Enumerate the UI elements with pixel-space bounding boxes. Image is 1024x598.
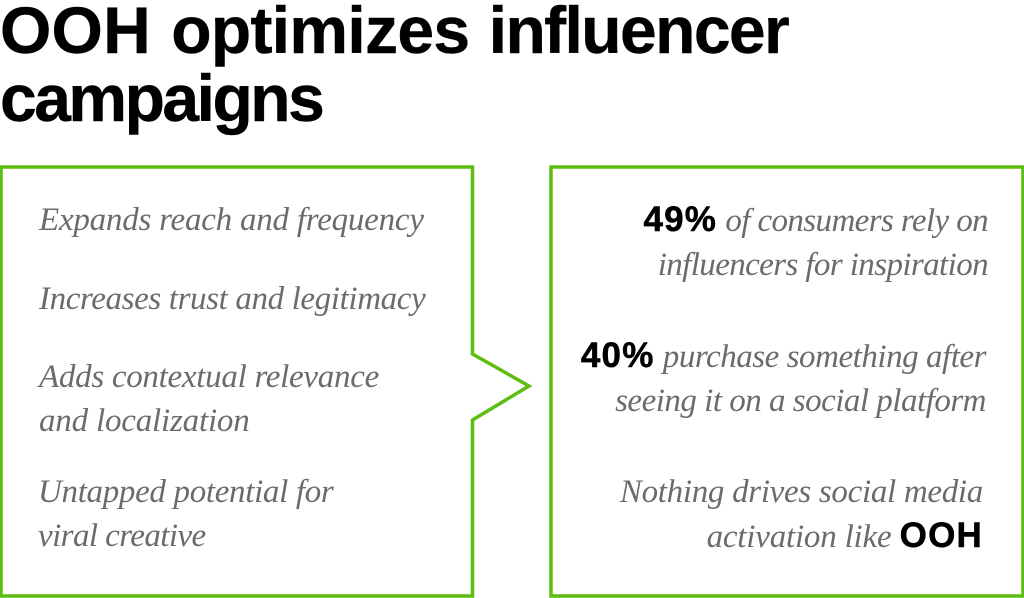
text: viral creative: viral creative <box>38 518 206 554</box>
stat: 40 percent: seeing it on a social platform <box>615 383 986 419</box>
title: campaigns <box>0 61 322 135</box>
stat: 49 percent: influencers for inspiration <box>658 247 988 283</box>
stat: 49 percent <box>643 200 988 283</box>
panel: right box <box>549 165 1024 598</box>
text: viral creative <box>38 474 334 554</box>
text: OOH activation: Nothing drives social media <box>620 474 983 510</box>
text: OOH activation <box>620 474 983 555</box>
stat: 40 percent: 40% purchase something after <box>581 336 986 375</box>
text: expands reach: Expands reach and frequency <box>39 202 424 238</box>
text: increases trust: Increases trust and legitimacy <box>39 281 425 317</box>
text: contextual relevance: and localization <box>39 403 250 439</box>
panel: left callout box with arrow <box>0 165 532 598</box>
text: contextual relevance: Adds contextual relevance <box>39 359 379 395</box>
text: contextual relevance <box>37 359 379 439</box>
stat: 40 percent <box>581 336 986 419</box>
text: viral creative: Untapped potential for <box>38 474 333 510</box>
title <box>0 0 789 136</box>
stat: 49 percent: 49% of consumers rely on <box>643 200 988 239</box>
text: OOH activation: activation like OOH <box>707 516 983 555</box>
